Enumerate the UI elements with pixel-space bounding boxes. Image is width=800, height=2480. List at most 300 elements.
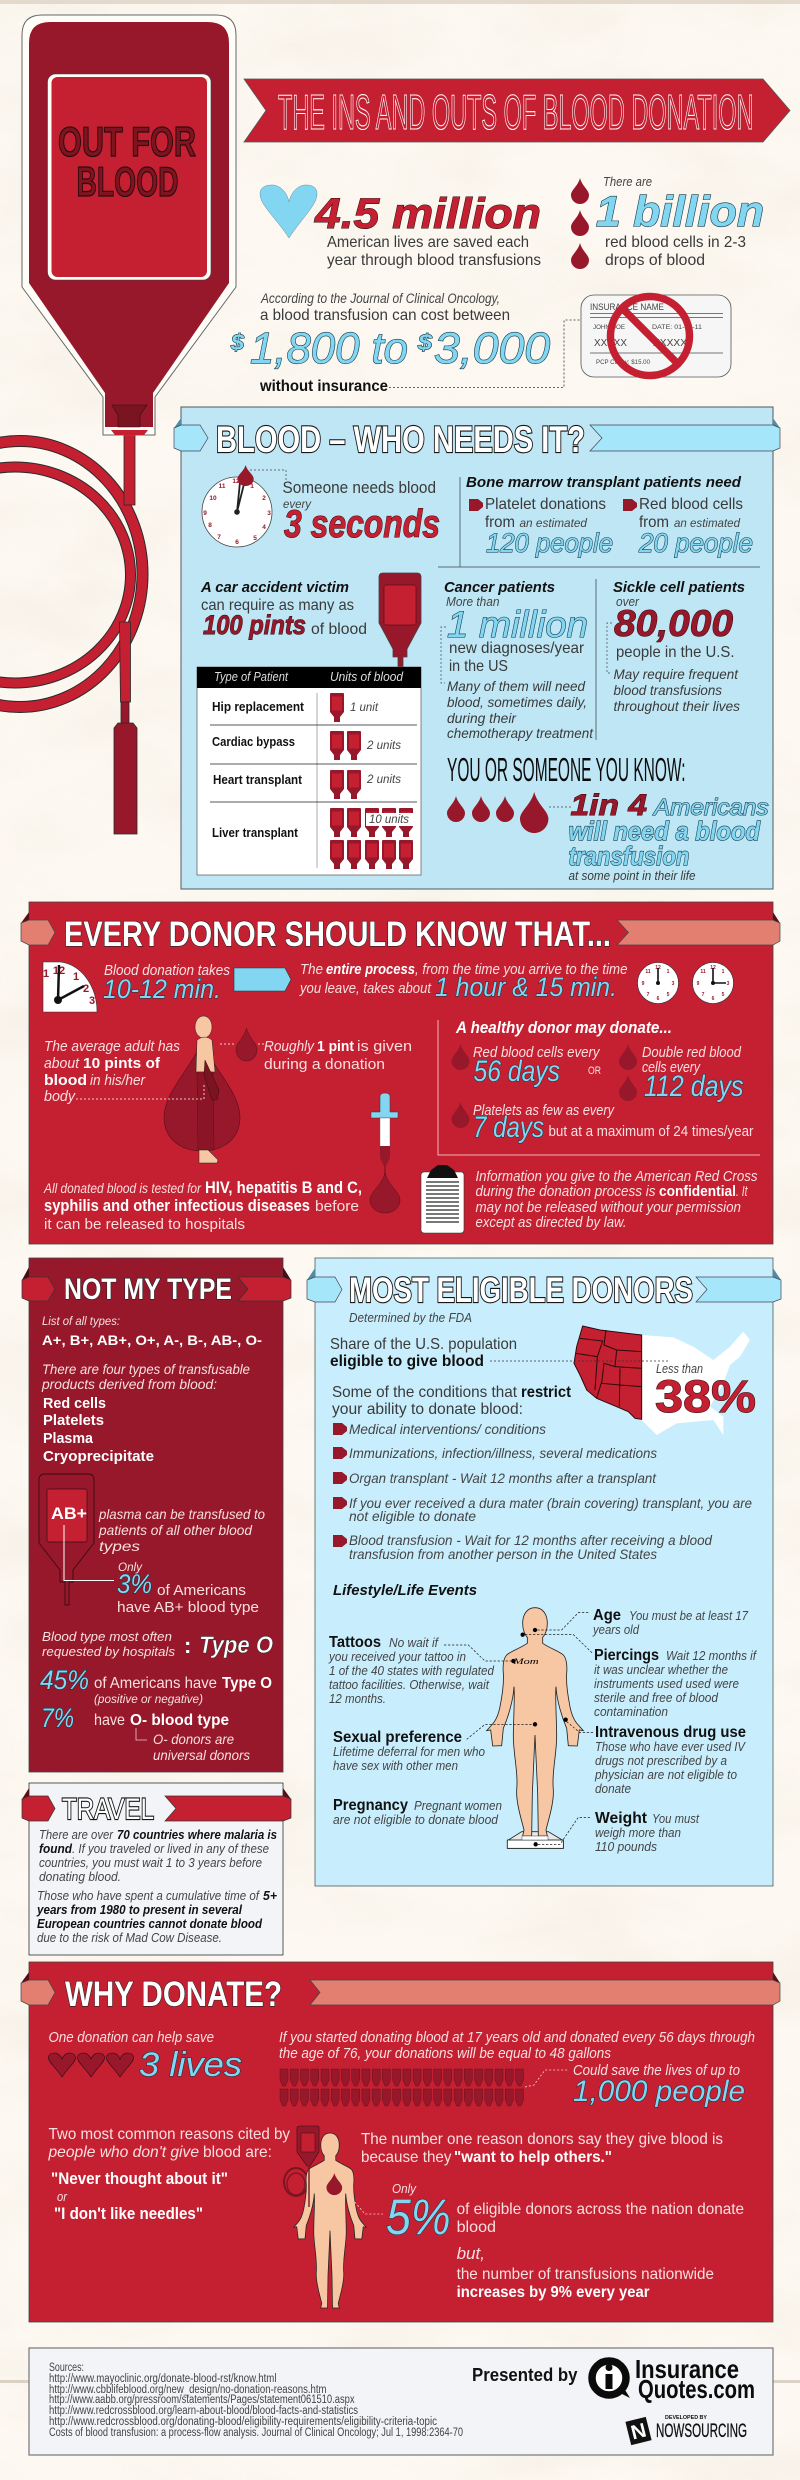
text: sources: Sources: — [49, 2362, 84, 2374]
ribbon heading: MOST ELIGIBLE DONORS — [349, 1271, 693, 1310]
text: 5 percent — [386, 2181, 744, 2301]
callout: pregnancy — [333, 1797, 502, 1827]
icons: two clocks: 11 — [700, 969, 706, 975]
icon: clock with drop: 8 — [208, 522, 212, 529]
text: list of types: products derived from blood: — [41, 1376, 217, 1392]
text: entire process: 1 hour & 15 min. — [435, 972, 617, 1002]
text: 10 pints: in his/her — [90, 1072, 146, 1089]
icon: clock with drop: 12 — [232, 478, 240, 485]
bag label — [48, 74, 211, 280]
text: you or someone you know: will need a blood — [568, 816, 761, 846]
callout: weight: Weight — [595, 1810, 648, 1827]
text: list of types: Red cells — [43, 1395, 106, 1412]
text: want to help others — [361, 2131, 723, 2166]
text: AB+ plasma — [98, 1506, 265, 1616]
cost of transfusion text: $ — [230, 330, 245, 355]
list: restrictions: If you ever received a dura mater (brain covering) transplant, you are — [349, 1495, 752, 1511]
text: AB+ plasma: types — [99, 1538, 140, 1554]
text: bone marrow: from — [485, 514, 515, 531]
text: share of population: restrict — [521, 1384, 572, 1401]
table: units of blood by patient type: Units of blood — [330, 669, 404, 684]
text: bone marrow: 120 people — [486, 528, 613, 558]
callout: pregnancy: are not eligible to donate blood — [333, 1812, 499, 1827]
text: tested for diseases: All donated blood is tested for — [43, 1180, 202, 1196]
callout: tattoos: Tattoos — [329, 1634, 381, 1651]
callout: age: years old — [592, 1622, 640, 1637]
list: restrictions: transfusion from another person in the United States — [349, 1546, 657, 1562]
text: healthy donor: but at a maximum of 24 times/year — [548, 1123, 754, 1140]
callout: pregnancy: Pregnant women — [414, 1798, 502, 1813]
text: cancer patients: blood, sometimes daily, — [447, 694, 587, 710]
cost of transfusion text — [230, 291, 580, 395]
callout: sexual preference: have sex with other men — [333, 1758, 458, 1773]
text: 10-12 min: 10-12 min. — [103, 974, 221, 1004]
text: list of types: There are four types of transfusable — [42, 1361, 250, 1377]
icon: insurance card with no symbol: PCP Copay: $15.00 — [596, 360, 651, 366]
text: sickle cell patients: over — [616, 594, 640, 609]
text: cancer patients: More than — [446, 594, 500, 609]
text: sources: Costs of blood transfusion: a process-flow analysis. Journal of Clinical Oncology; Jul 1, 1998:2364-70 — [49, 2427, 463, 2439]
icons: two clocks — [638, 962, 734, 1004]
callout: weight: 110 pounds — [595, 1839, 657, 1854]
icons: two clocks: 12 — [710, 965, 716, 971]
text: confidential — [476, 1168, 758, 1231]
map: US share eligible — [490, 1326, 756, 1435]
callout: age: Age — [593, 1607, 621, 1624]
text: share of population: Some of the conditions that — [332, 1384, 518, 1401]
text: 3 lives: 3 lives — [139, 2046, 242, 2084]
text: bone marrow: Platelet donations — [485, 496, 606, 513]
text: cancer patients: new diagnoses/year — [449, 640, 585, 657]
text: 48 gallons — [279, 2029, 755, 2062]
ribbon heading: WHY DONATE? — [65, 1975, 282, 2014]
text: you or someone you know: 1in 4 — [570, 789, 647, 822]
text: travel details: There are over — [39, 1827, 114, 1842]
text: 5 percent: the number of transfusions nationwide — [457, 2266, 714, 2283]
icons: two clocks: 6 — [657, 996, 660, 1002]
text: tested for diseases — [43, 1178, 362, 1233]
cost of transfusion text: without insurance — [259, 378, 388, 395]
text: travel details — [36, 1827, 277, 1945]
icon: dropper — [370, 1093, 400, 1213]
text: 1 pint — [264, 1038, 412, 1073]
text: 48 gallons: If you started donating blood at 17 years old and donated every 56 days through — [279, 2029, 755, 2046]
icon: clock section: 2 — [83, 983, 89, 995]
callout: intravenous drug use — [594, 1724, 746, 1796]
text: confidential: Information you give to the American Red Cross — [476, 1168, 758, 1185]
ribbon heading: NOT MY TYPE — [64, 1273, 232, 1306]
icon: clock with drop: 6 — [235, 539, 239, 546]
icons: two clocks: 1 — [667, 969, 670, 975]
text: share of population: eligible to give blood — [330, 1353, 484, 1370]
list: restrictions: Organ transplant - Wait 12 months after a transplant — [349, 1470, 657, 1486]
text: 3 seconds: Someone needs blood — [282, 478, 436, 497]
callout: age — [592, 1607, 749, 1637]
text: bone marrow: an estimated — [674, 516, 740, 530]
stat: 1 billion red blood cells — [571, 174, 764, 269]
table: units of blood by patient type — [197, 667, 421, 875]
logo: NowSourcing: DEVELOPED BY — [665, 2415, 707, 2421]
stat: 4.5 million lives: American lives are saved each — [327, 234, 529, 251]
callout: tattoos — [328, 1634, 495, 1706]
text: you or someone you know: at some point in their life — [568, 868, 696, 883]
callout: intravenous drug use: Intravenous drug use — [595, 1724, 746, 1741]
tube lower segments — [114, 435, 137, 834]
list: restrictions: Medical interventions/ conditions — [349, 1421, 546, 1437]
text: type O: 45% — [40, 1665, 89, 1695]
figure: donor with bag — [284, 2126, 383, 2308]
text: confidential: confidential — [659, 1183, 736, 1200]
text: bone marrow: Bone marrow transplant patients need — [466, 474, 742, 491]
text: reasons not to give: or — [57, 2189, 68, 2204]
cost of transfusion text: $ — [417, 330, 433, 355]
text: tested for diseases: syphilis and other infectious diseases — [44, 1196, 310, 1215]
callout: piercings: instruments used used were — [594, 1676, 739, 1691]
text: cancer patients: Many of them will need — [447, 678, 586, 694]
text: 3 seconds: every — [283, 497, 312, 511]
text: list of types: Plasma — [43, 1430, 94, 1447]
icon: rows of blood bags — [280, 2069, 524, 2106]
icon: clock with drop: 10 — [209, 495, 217, 502]
text: 5 percent: of eligible donors across the nation donate — [457, 2201, 744, 2218]
ribbon heading — [22, 1267, 291, 1306]
icon: insurance card with no symbol — [581, 295, 731, 377]
text: list of types: List of all types: — [42, 1316, 120, 1328]
text: travel details: found — [39, 1841, 73, 1856]
text: 10 pints: body — [44, 1088, 76, 1105]
callout: piercings: it was unclear whether the — [594, 1662, 728, 1677]
text: healthy donor: 112 days — [644, 1070, 744, 1103]
stat: 4.5 million lives: 4.5 million — [314, 190, 541, 238]
text: car accident victim: 100 pints — [203, 610, 306, 640]
text: healthy donor: Platelets as few as every — [473, 1102, 615, 1119]
text: tested for diseases: HIV, hepatitis B and C, — [205, 1178, 362, 1197]
text: cancer patients: Cancer patients — [444, 579, 555, 596]
text: 10 pints: The average adult has — [44, 1038, 180, 1055]
callout: tattoos: tattoo facilities. Otherwise, wait — [329, 1677, 490, 1692]
text: AB+ plasma: plasma can be transfused to — [98, 1506, 265, 1522]
icons: two clocks: 11 — [645, 969, 651, 975]
text: travel details: 5+ — [263, 1888, 277, 1903]
text: want to help others: The number one reason donors say they give blood is — [361, 2131, 723, 2148]
text: sources: http://www.aabb.org/pressroom/statements/Pages/statement061510.aspx — [49, 2394, 355, 2406]
icon: clock with drop — [202, 465, 286, 547]
list: restrictions — [333, 1421, 752, 1562]
callout: intravenous drug use: drugs not prescribed by a — [595, 1753, 727, 1768]
arrow — [234, 968, 291, 991]
text: sickle cell patients: 80,000 — [614, 603, 733, 644]
text: you or someone you know: transfusion — [568, 841, 690, 871]
ribbon heading — [21, 1972, 780, 2014]
text: reasons not to give: people who don't give — [48, 2144, 199, 2161]
text: bone marrow: 20 people — [638, 528, 753, 558]
text: healthy donor: cells every — [642, 1059, 701, 1076]
cost of transfusion text: a blood transfusion can cost between — [260, 307, 510, 324]
heading: lifestyle: Lifestyle/Life Events — [333, 1582, 477, 1599]
text: want to help others: "want to help others." — [454, 2149, 612, 2166]
text: reasons not to give: "I don't like needles" — [54, 2204, 203, 2223]
text: you or someone you know: Americans — [652, 794, 769, 820]
text: sickle cell patients: people in the U.S. — [616, 644, 734, 661]
panel: travel — [22, 1783, 291, 1955]
callout: sexual preference: Lifetime deferral for men who — [333, 1744, 485, 1759]
panel: not my type — [22, 1258, 291, 1772]
icons: two clocks: 5 — [722, 992, 725, 998]
text: healthy donor: A healthy donor may donate... — [455, 1018, 672, 1037]
text: travel details: Those who have spent a cumulative time of — [37, 1888, 260, 1903]
text: bone marrow: from — [639, 514, 669, 531]
icon: clock with drop: 5 — [253, 535, 257, 542]
text: 10-12 min: Blood donation takes — [104, 962, 230, 979]
text: bone marrow: Red blood cells — [639, 496, 743, 513]
icon: clock section: 12 — [53, 965, 65, 977]
text: 1 pint: is given — [357, 1038, 412, 1055]
text: 48 gallons: the age of 76, your donations will be equal to 48 gallons — [279, 2045, 611, 2062]
text: sickle cell patients: Sickle cell patients — [613, 579, 745, 596]
ribbon heading: EVERY DONOR SHOULD KNOW THAT... — [64, 915, 611, 954]
panel: most eligible donors — [307, 1258, 781, 1886]
text: list of types: Cryoprecipitate — [43, 1448, 154, 1465]
callout: tattoos: 1 of the 40 states with regulated — [329, 1663, 495, 1678]
callout: piercings: Wait 12 months if — [666, 1648, 757, 1663]
list: restrictions: not eligible to donate — [349, 1508, 476, 1524]
icon: one pint drop — [220, 1028, 264, 1061]
icons: two clocks: 6 — [712, 996, 715, 1002]
panel: why donate — [21, 1962, 780, 2322]
text: confidential: except as directed by law. — [476, 1214, 626, 1231]
text: share of population: Determined by the FDA — [349, 1310, 472, 1325]
text: type O: O- donors are — [153, 1731, 234, 1747]
callout: weight — [595, 1810, 700, 1854]
text: travel details: . If you traveled or lived in any of these — [72, 1841, 269, 1856]
text: 5 percent: Only — [392, 2181, 417, 2196]
tube loops — [0, 441, 142, 707]
text: sources: http://www.mayoclinic.org/donate-blood-rst/know.html — [49, 2373, 276, 2385]
text: healthy donor — [452, 1018, 754, 1144]
text: bone marrow — [466, 474, 753, 558]
text: type O: : — [184, 1633, 191, 1658]
bag body — [29, 22, 229, 427]
stat: 4.5 million lives — [260, 185, 541, 269]
text: reasons not to give: Two most common reasons cited by — [48, 2126, 290, 2143]
text: type O: Type O — [222, 1675, 272, 1692]
text: confidential: during the donation process is — [476, 1183, 656, 1200]
text: cancer patients: chemotherapy treatment — [447, 725, 594, 741]
callout: age: You must be at least 17 — [629, 1608, 749, 1623]
ribbon heading: TRAVEL — [62, 1793, 154, 1826]
logo: NowSourcing: N — [629, 2419, 649, 2444]
table: units of blood by patient type: 2 units — [366, 738, 401, 752]
icon: clock section: 1 — [43, 968, 49, 980]
text: 1 pint: during a donation — [264, 1056, 385, 1073]
callout: pregnancy: Pregnancy — [333, 1797, 408, 1814]
icon: clock with drop: 3 — [267, 510, 271, 517]
bag outer outline — [22, 15, 236, 435]
text: 1 pint: 1 pint — [317, 1038, 354, 1055]
icons: two clocks: 7 — [702, 992, 705, 998]
text: AB+ plasma: 3% — [117, 1569, 152, 1599]
text: 10 pints: 10 pints of — [83, 1055, 161, 1072]
text: entire process: you leave, takes about — [299, 980, 432, 997]
text: car accident victim: can require as many as — [201, 597, 354, 614]
icon: three drops — [571, 178, 589, 269]
text: sickle cell patients — [607, 579, 745, 714]
text: 3 seconds — [282, 478, 440, 546]
text: reasons not to give: blood are: — [203, 2144, 272, 2161]
figure: body with callouts: Mom — [512, 1656, 539, 1666]
table: units of blood by patient type: Type of Patient — [214, 669, 289, 684]
text: bone marrow: an estimated — [520, 516, 587, 530]
text: 10 pints: blood — [44, 1072, 87, 1089]
icons: two clocks: 5 — [667, 992, 670, 998]
text: travel details: due to the risk of Mad Cow Disease. — [37, 1930, 222, 1945]
text: sources: http://www.redcrossblood.org/learn-about-blood/blood-facts-and-statistics — [49, 2405, 358, 2417]
text: 1,000 people: 1,000 people — [573, 2075, 745, 2108]
list: restrictions: Blood transfusion - Wait for 12 months after receiving a blood — [349, 1532, 713, 1548]
table: units of blood by patient type: Cardiac bypass — [212, 735, 295, 749]
text: sources: http://www.redcrossblood.org/donating-blood/eligibility-requirements/eligibility-criteria-topic — [49, 2416, 437, 2428]
icons: two clocks: 12 — [655, 965, 661, 971]
text: share of population — [330, 1310, 572, 1418]
text: healthy donor: 7 days — [473, 1111, 544, 1144]
text: 3 lives — [48, 2029, 242, 2084]
icons: two clocks: 7 — [647, 992, 650, 998]
text: healthy donor: Red blood cells every — [473, 1044, 601, 1061]
text: 10 pints — [44, 1038, 180, 1105]
callout: weight: weigh more than — [595, 1825, 681, 1840]
bag label: BLOOD — [76, 158, 178, 205]
map: US share eligible: Less than — [656, 1361, 703, 1376]
stat: 4.5 million lives: year through blood transfusions — [327, 252, 541, 269]
text: cancer patients: during their — [447, 710, 517, 726]
text: AB+ plasma: Only — [118, 1560, 143, 1574]
icon: clipboard — [421, 1165, 464, 1233]
text: type O: universal donors — [153, 1747, 250, 1763]
text: type O: have — [94, 1712, 125, 1729]
icon: insurance card with no symbol: JOHN DOE — [593, 324, 626, 331]
blood bag illustration — [0, 15, 236, 834]
text: reasons not to give — [48, 2126, 290, 2223]
callout: piercings: sterile and free of blood — [594, 1690, 719, 1705]
text: list of types: A+, B+, AB+, O+, A-, B-, AB-, O- — [42, 1332, 262, 1348]
callout: piercings: contamination — [594, 1704, 668, 1719]
text: sickle cell patients: blood transfusions — [614, 682, 722, 698]
callout: intravenous drug use: donate — [595, 1781, 631, 1796]
icon: three hearts — [48, 2053, 134, 2077]
text: type O: of Americans have — [94, 1675, 217, 1692]
text: type O: requested by hospitals — [42, 1644, 175, 1659]
text: share of population: Share of the U.S. population — [330, 1336, 517, 1353]
text: AB+ plasma: have AB+ blood type — [117, 1599, 259, 1616]
text: list of types — [41, 1316, 262, 1465]
ribbon heading — [22, 1788, 291, 1826]
table: units of blood by patient type: 10 units — [369, 812, 409, 826]
icon: clock with drop: 11 — [219, 483, 226, 490]
icons: two clocks: 1 — [722, 969, 725, 975]
figure: body with callouts — [444, 1608, 593, 1848]
callout: piercings: Piercings — [594, 1647, 659, 1664]
text: entire process: , from the time you arrive to the time — [415, 961, 628, 978]
text: confidential: . It — [736, 1183, 748, 1200]
icon: clock section: 3 — [89, 995, 95, 1007]
text: 3 seconds: 3 seconds — [284, 503, 440, 546]
text: type O: Type O — [199, 1632, 273, 1659]
callout: intravenous drug use: physician are not eligible to — [594, 1767, 737, 1782]
callout: piercings — [594, 1647, 757, 1719]
icon: clock with drop: 4 — [262, 524, 266, 531]
text: type O: Blood type most often — [42, 1629, 172, 1644]
text: presented by: Presented by — [472, 2365, 578, 2385]
text: entire process: entire process — [326, 961, 415, 978]
text: tested for diseases: before — [315, 1198, 359, 1215]
icon: clock section — [43, 962, 97, 1012]
text: 5 percent: increases by 9% every year — [457, 2284, 650, 2301]
text: sources — [49, 2362, 463, 2439]
text: travel details: countries, you must wait 1 to 3 years before — [39, 1855, 262, 1870]
icon: four drops — [447, 792, 548, 833]
text: cancer patients: 1 million — [447, 604, 588, 645]
table: units of blood by patient type: 2 units — [366, 772, 401, 786]
text: type O: O- blood type — [130, 1712, 229, 1729]
logo: InsuranceQuotes.com — [592, 2354, 755, 2404]
icon: insurance card with no symbol: XXXXX — [653, 338, 687, 349]
panel: blood who needs it — [174, 407, 780, 889]
stat: 1 billion red blood cells: drops of blood — [605, 252, 705, 269]
icon: AB+ blood bag — [39, 1474, 114, 1605]
icon: insurance card with no symbol: INSURANCE NAME — [590, 302, 664, 313]
icon: person with blood volume — [76, 1016, 240, 1163]
callout: sexual preference: Sexual preference — [333, 1729, 462, 1746]
callout: weight: You must — [652, 1811, 700, 1826]
text: 1,000 people: Could save the lives of up to — [573, 2062, 740, 2079]
table: units of blood by patient type: Heart transplant — [213, 773, 303, 787]
logo: NowSourcing — [625, 2415, 747, 2445]
icon: AB+ blood bag: AB+ — [51, 1504, 87, 1523]
text: 1,000 people — [525, 2062, 745, 2108]
text: car accident victim — [200, 579, 367, 640]
text: 3 lives: One donation can help save — [48, 2029, 214, 2046]
text: healthy donor: Double red blood — [642, 1044, 742, 1061]
callout: tattoos: you received your tattoo in — [328, 1649, 466, 1664]
text: travel details: 70 countries where malaria is — [117, 1827, 277, 1842]
table: units of blood by patient type: Liver transplant — [212, 826, 299, 840]
cost of transfusion text: According to the Journal of Clinical Oncology, — [260, 291, 500, 306]
bag connector — [112, 405, 147, 427]
stat: 1 billion red blood cells: 1 billion — [596, 188, 764, 236]
text: travel details: years from 1980 to present in several — [36, 1902, 242, 1917]
callout: tattoos: 12 months. — [329, 1691, 386, 1706]
text: sources: http://www.cbblifeblood.org/new_design/no-donation-reasons.htm — [49, 2384, 326, 2396]
icon: heart — [260, 185, 317, 238]
text: 10 pints: about — [44, 1055, 80, 1072]
stat: 1 billion red blood cells: There are — [603, 174, 652, 189]
bag label: OUT FOR — [58, 118, 196, 165]
icons: two clocks: 3 — [672, 981, 675, 987]
table: units of blood by patient type: 1 unit — [350, 700, 379, 714]
icon: clock with drop: 2 — [262, 495, 266, 502]
text: sickle cell patients: throughout their lives — [614, 698, 740, 714]
list: restrictions: Immunizations, infection/illness, several medications — [349, 1445, 657, 1461]
text: tested for diseases: it can be released to hospitals — [44, 1216, 245, 1233]
text: 5 percent: blood — [457, 2219, 496, 2236]
text: 5 percent: 5% — [386, 2189, 450, 2245]
text: car accident victim: A car accident victim — [200, 579, 349, 596]
text: AB+ plasma: patients of all other blood — [98, 1522, 253, 1538]
callout: tattoos: No wait if — [389, 1635, 439, 1650]
text: type O — [40, 1629, 273, 1763]
icons: two clocks: 9 — [697, 981, 700, 987]
text: entire process: The — [300, 961, 323, 978]
